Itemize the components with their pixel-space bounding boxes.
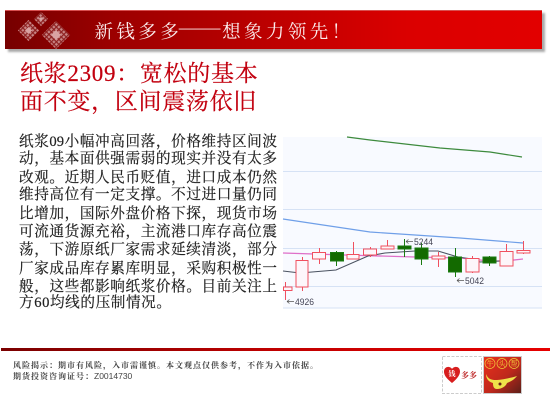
title: 面不变，区间震荡依旧 <box>20 83 257 116</box>
icon: diamond ornament <box>18 12 70 49</box>
logo: niu tou bang <box>483 356 522 394</box>
logo: qian duo duo: 钱 <box>448 369 456 378</box>
risk disclosure text <box>13 360 319 382</box>
title <box>20 55 258 116</box>
banner heading: 新钱多多——想象力领先！ <box>94 13 354 45</box>
risk disclosure text: 期货投资咨询证号：Z0014730 <box>13 371 132 382</box>
body text <box>19 130 277 311</box>
bullish candles <box>284 240 530 300</box>
price label 5244 <box>406 237 433 248</box>
risk disclosure text: 风险揭示：期市有风险，入市需谨慎。本文观点仅供参考，不作为入市依据。 <box>13 360 319 371</box>
body text: 厂家成品库存累库明显，采购积极性一 <box>19 257 277 278</box>
price label 4926 <box>287 297 314 308</box>
body text: 荡，下游原纸厂家需求延续清淡，部分 <box>19 238 277 259</box>
price label 4926: 4926 <box>295 297 314 308</box>
price label 5042 <box>457 276 484 287</box>
moving average lines <box>283 137 523 273</box>
title: 纸浆2309：宽松的基本 <box>20 55 258 88</box>
body text: 动，基本面供强需弱的现实并没有太多 <box>19 147 277 168</box>
logo: niu tou bang: 帮 <box>510 359 518 368</box>
body text: 般，这些都影响纸浆价格。目前关注上 <box>19 275 277 296</box>
header banner <box>5 10 542 49</box>
footer divider <box>1 348 550 351</box>
icon: bull head <box>486 374 517 389</box>
body text: 可流通货源充裕，主流港口库存高位震 <box>19 220 277 241</box>
logo: niu tou bang: 牛 <box>486 359 494 368</box>
body text: 维持高位有一定支撑。不过进口量仍同 <box>19 187 277 203</box>
logo: qian duo duo <box>442 356 482 394</box>
bearish candles <box>330 239 496 277</box>
body text: 比增加，国际外盘价格下探，现货市场 <box>19 202 277 223</box>
price label 5042: 5042 <box>465 276 484 287</box>
chart background <box>283 137 542 308</box>
body text: 纸浆09小幅冲高回落，价格维持区间波 <box>19 130 277 151</box>
price label 5244: 5244 <box>414 237 433 248</box>
logo: qian duo duo: 多多 <box>461 370 477 380</box>
body text: 方60均线的压制情况。 <box>19 295 172 311</box>
body text: 改观。近期人民币贬值，进口成本仍然 <box>19 166 277 187</box>
icon: heart <box>444 367 460 383</box>
logo: niu tou bang: 头 <box>498 359 506 368</box>
